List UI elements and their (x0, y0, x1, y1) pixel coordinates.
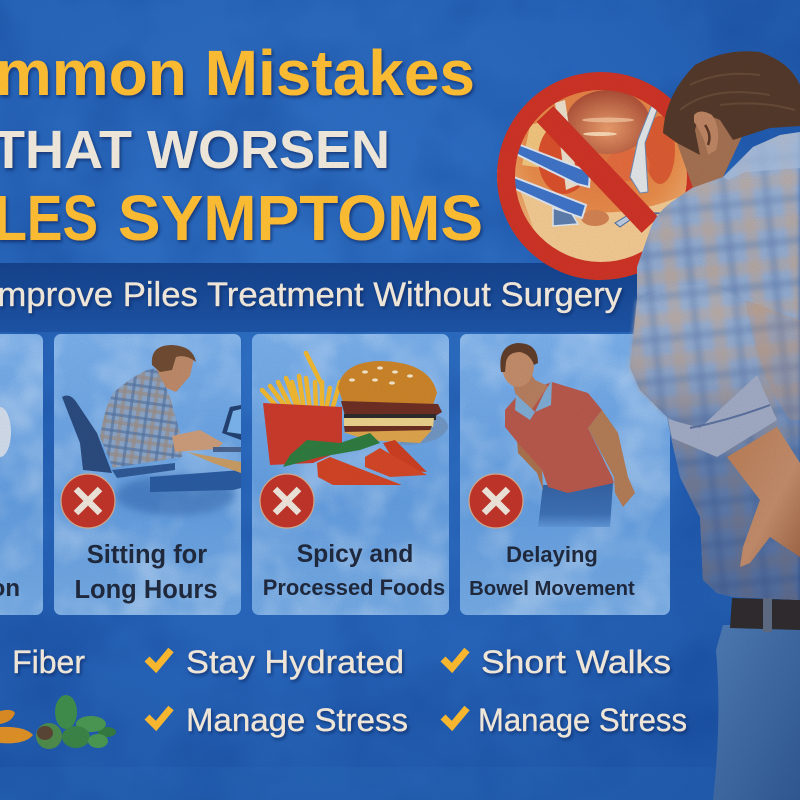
ear (694, 112, 718, 155)
tips list: Manage Stress (186, 702, 408, 738)
forearm and hand (727, 427, 800, 567)
title (0, 37, 483, 254)
subtitle band (0, 263, 640, 332)
panel: sitting for long hours (54, 334, 241, 615)
shirt (620, 120, 800, 610)
hair (663, 51, 800, 155)
neck and face (670, 100, 745, 188)
figure: man holding lower back (620, 51, 800, 800)
label: Delaying (506, 542, 598, 567)
tips list (12, 644, 687, 738)
panel: delaying bowel movement (460, 334, 670, 615)
icon: prohibited surgery (498, 80, 697, 272)
illustration: man at desk (62, 345, 241, 492)
label: Long Hours (74, 576, 218, 604)
label (469, 542, 635, 600)
tips list: Fiber (12, 644, 85, 680)
tips list: Stay Hydrated (186, 644, 404, 680)
label (263, 541, 445, 600)
belt (730, 598, 800, 632)
label: Spicy and (297, 541, 413, 568)
tips list: Short Walks (481, 644, 671, 680)
illustration: fast food (262, 353, 448, 485)
panel: spicy and processed foods (252, 334, 449, 615)
illustration: man in red polo (500, 343, 635, 527)
tips list: Manage Stress (478, 702, 687, 738)
icon: red x (260, 474, 314, 528)
label: Bowel Movement (469, 578, 635, 600)
icon: turmeric and basil (0, 695, 116, 749)
hair strands (680, 74, 795, 110)
subtitle band: Improve Piles Treatment Without Surgery (0, 276, 623, 314)
sleeve (630, 285, 777, 457)
title: SYMPTOMS (118, 182, 483, 254)
panel: constipation card (0, 334, 43, 615)
icon: red x (61, 474, 115, 528)
jeans (713, 625, 800, 800)
title: THAT WORSEN (0, 120, 390, 180)
label: Processed Foods (263, 575, 445, 600)
label: Sitting for (87, 541, 207, 569)
icon: forceps (498, 102, 660, 227)
icons: checkmarks (147, 650, 467, 726)
icon: red x (469, 474, 523, 528)
